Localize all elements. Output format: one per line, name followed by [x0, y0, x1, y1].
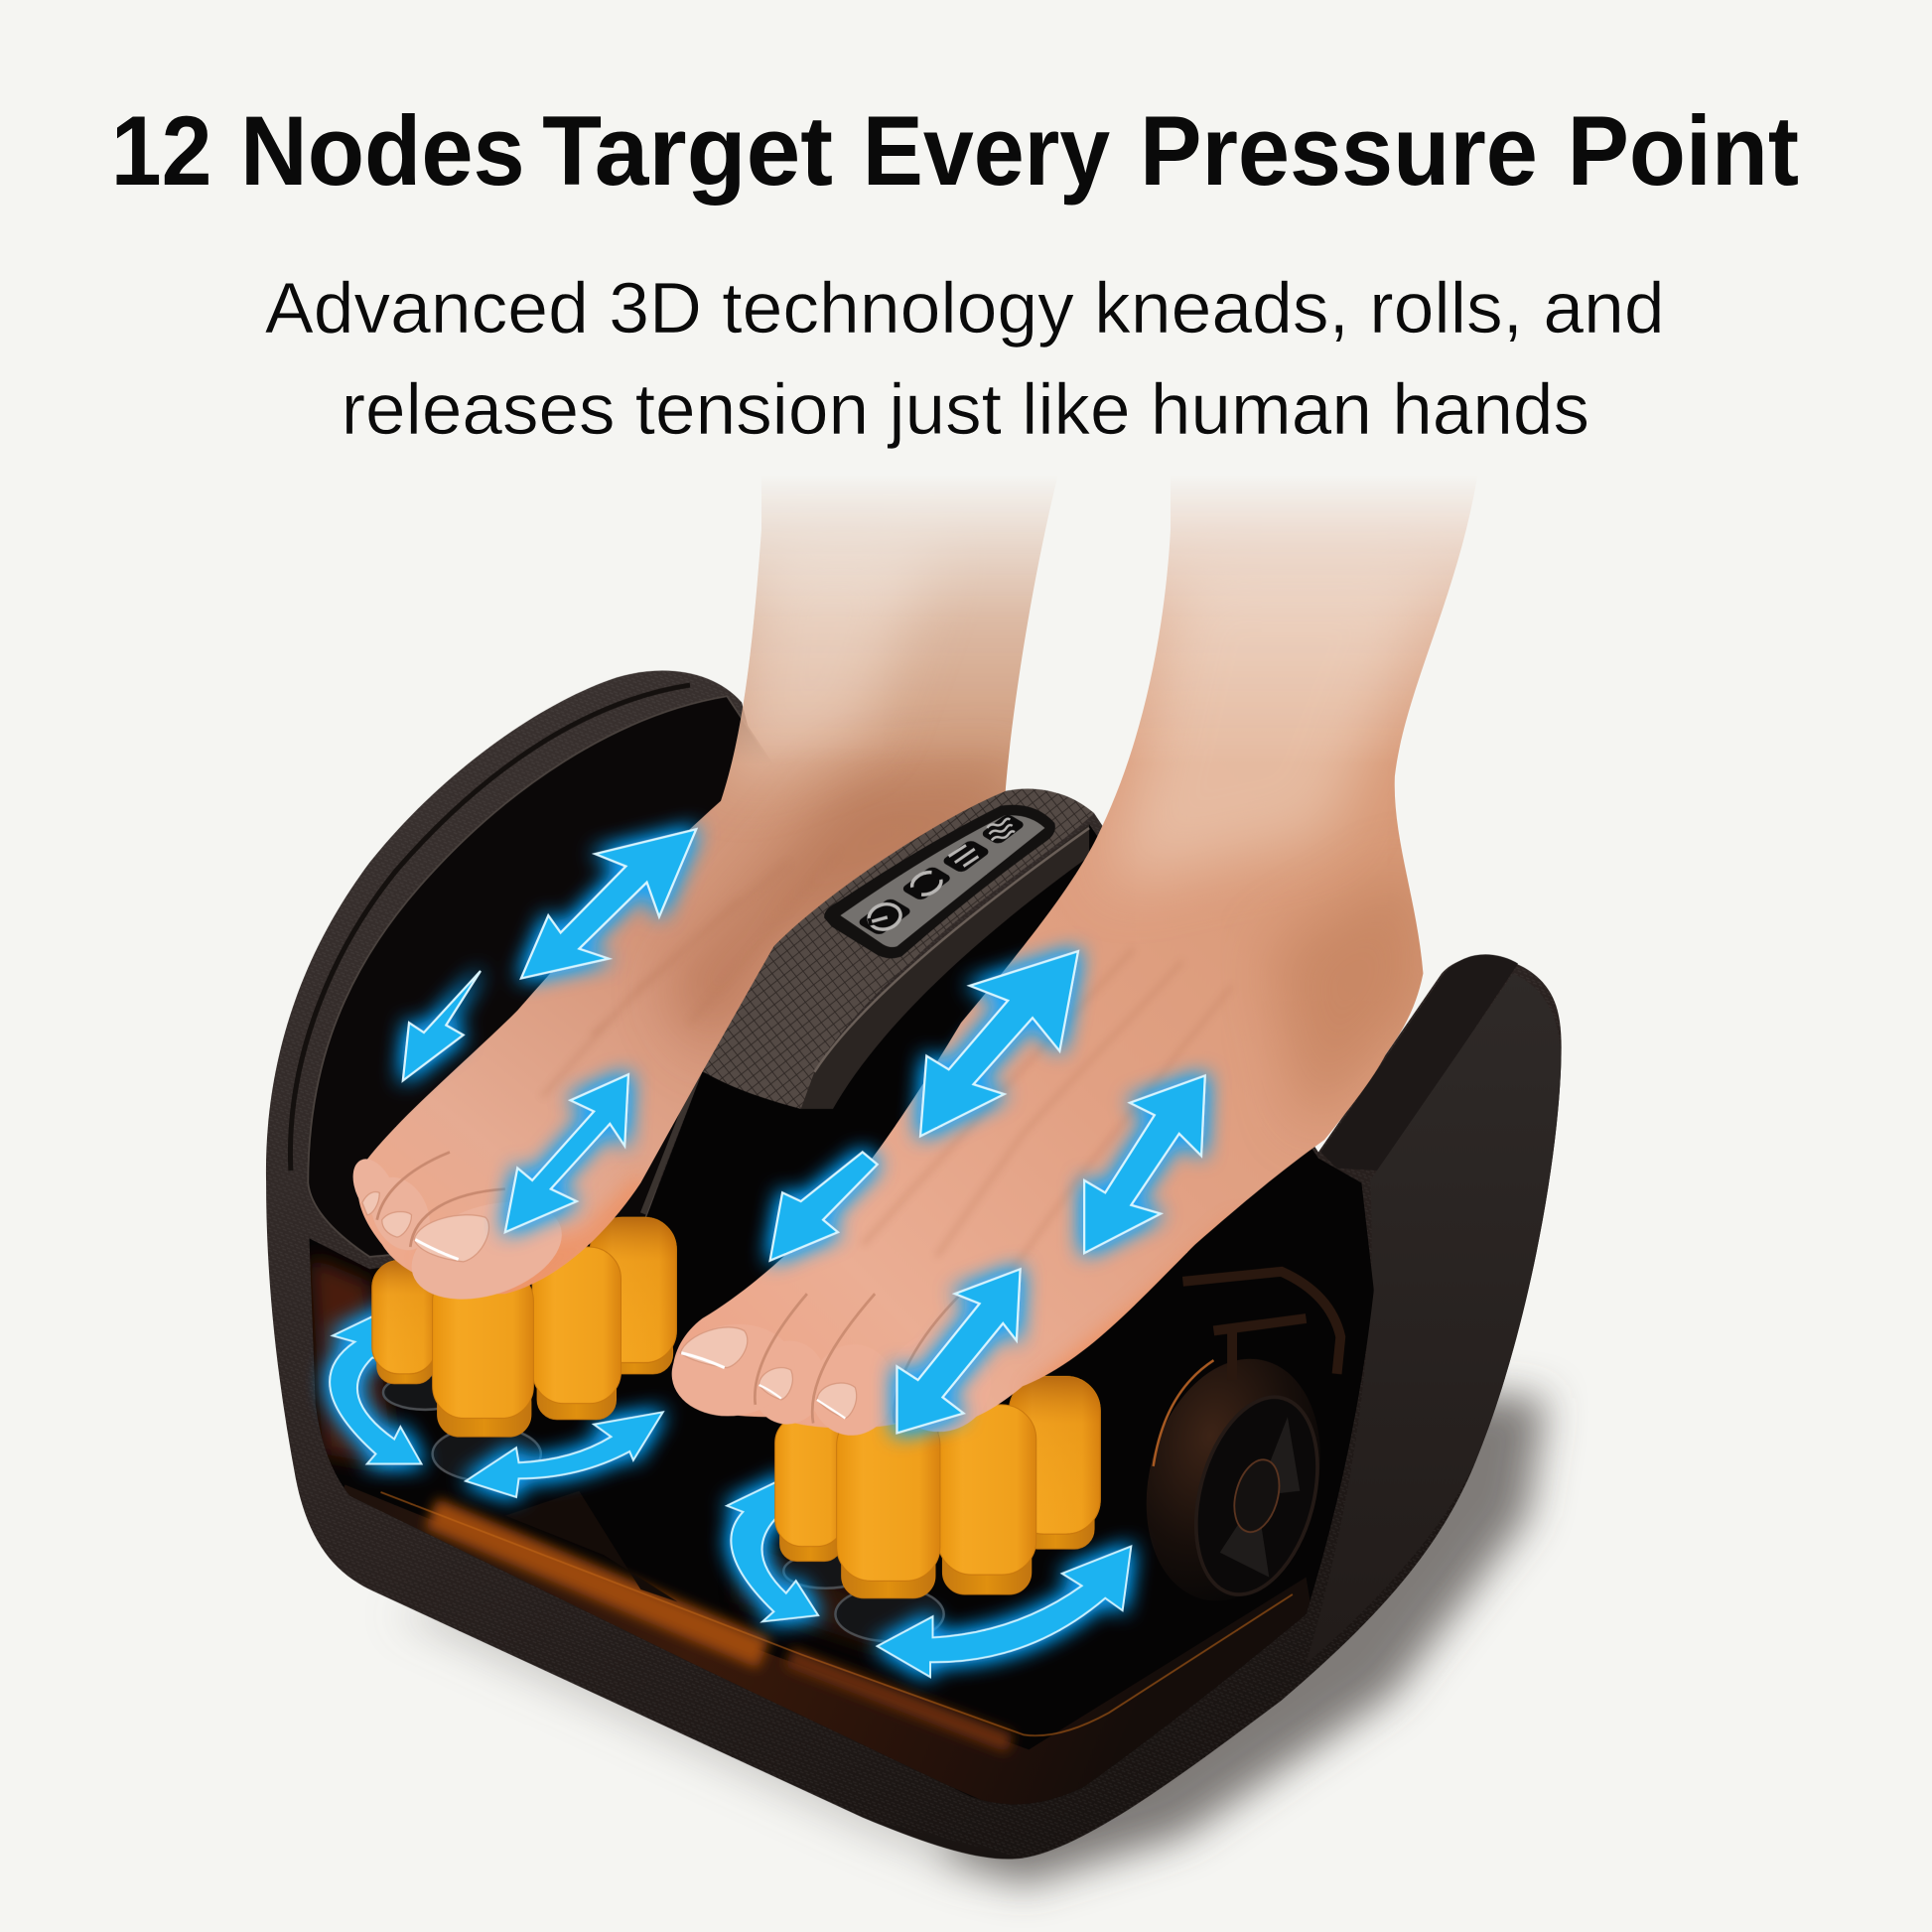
left toes [353, 1151, 562, 1300]
right roller cluster [775, 1376, 1100, 1598]
arrow: right foot outer [1084, 1075, 1205, 1253]
lower transparent chamber [296, 813, 1405, 1824]
roller [372, 1261, 436, 1384]
right ankle shading [1266, 877, 1424, 1114]
arrow: left foot upper [521, 829, 696, 978]
rotation arrows behind rollers [330, 1307, 1131, 1677]
left toenails [362, 1191, 488, 1262]
arrow: right cluster sweep [878, 1547, 1131, 1677]
console lower edge [814, 828, 1089, 1072]
roller shafts [383, 1375, 944, 1641]
title: Every [863, 96, 1110, 207]
arrow: right foot side [770, 1152, 878, 1261]
heat button [980, 813, 1027, 845]
right toenails [680, 1327, 857, 1418]
power button [857, 897, 913, 936]
roller [1009, 1376, 1100, 1549]
right toes [666, 1294, 991, 1442]
roller [433, 1269, 533, 1437]
floor shadow [394, 1392, 1547, 1885]
right wall face [1307, 973, 1561, 1663]
leather grain [266, 670, 1562, 1859]
outer shell [266, 670, 1562, 1859]
console lower left edge [643, 1069, 700, 1213]
left leg shading [665, 763, 1023, 1059]
roller [532, 1247, 621, 1420]
subtitle [265, 269, 1665, 450]
roller [837, 1411, 940, 1598]
roller [775, 1416, 844, 1561]
motor bracket [1182, 1272, 1340, 1380]
arrow: left cluster rotate [330, 1307, 421, 1463]
left roller cluster [372, 1217, 676, 1437]
mode button [900, 866, 953, 901]
fan wheel [1146, 1358, 1319, 1596]
arrow: left cluster sweep [466, 1412, 663, 1497]
console front face [801, 824, 1089, 1109]
left arch seam [290, 685, 690, 1171]
arrow: right foot upper [920, 951, 1078, 1136]
motion arrows over feet [403, 829, 1205, 1433]
right wall top edge [1320, 954, 1518, 1171]
massager body [266, 670, 1562, 1859]
title: Target [542, 96, 833, 207]
roller [937, 1405, 1036, 1594]
arrow: right foot toes [897, 1269, 1021, 1433]
left foot [345, 469, 1059, 1318]
title: Nodes [240, 96, 525, 207]
center console band [700, 788, 1094, 1109]
foot veins [546, 977, 651, 1093]
control panel [824, 805, 1055, 958]
roller [590, 1217, 676, 1374]
title: 12 [111, 96, 211, 207]
intensity button [941, 839, 991, 874]
right foot [666, 469, 1478, 1442]
arrow: right cluster rotate [727, 1476, 818, 1621]
lower gears left [505, 1491, 678, 1601]
subtitle: releases tension just like human hands [342, 370, 1589, 450]
title: Pressure [1140, 96, 1538, 207]
title: Point [1568, 96, 1799, 207]
subtitle: Advanced 3D technology kneads, rolls, and [265, 269, 1665, 348]
foot tendons [865, 1136, 1044, 1257]
arrow: left foot toes [505, 1074, 628, 1232]
arrow: left foot side [403, 971, 481, 1080]
title [111, 96, 1799, 207]
left arch interior [308, 696, 788, 1257]
